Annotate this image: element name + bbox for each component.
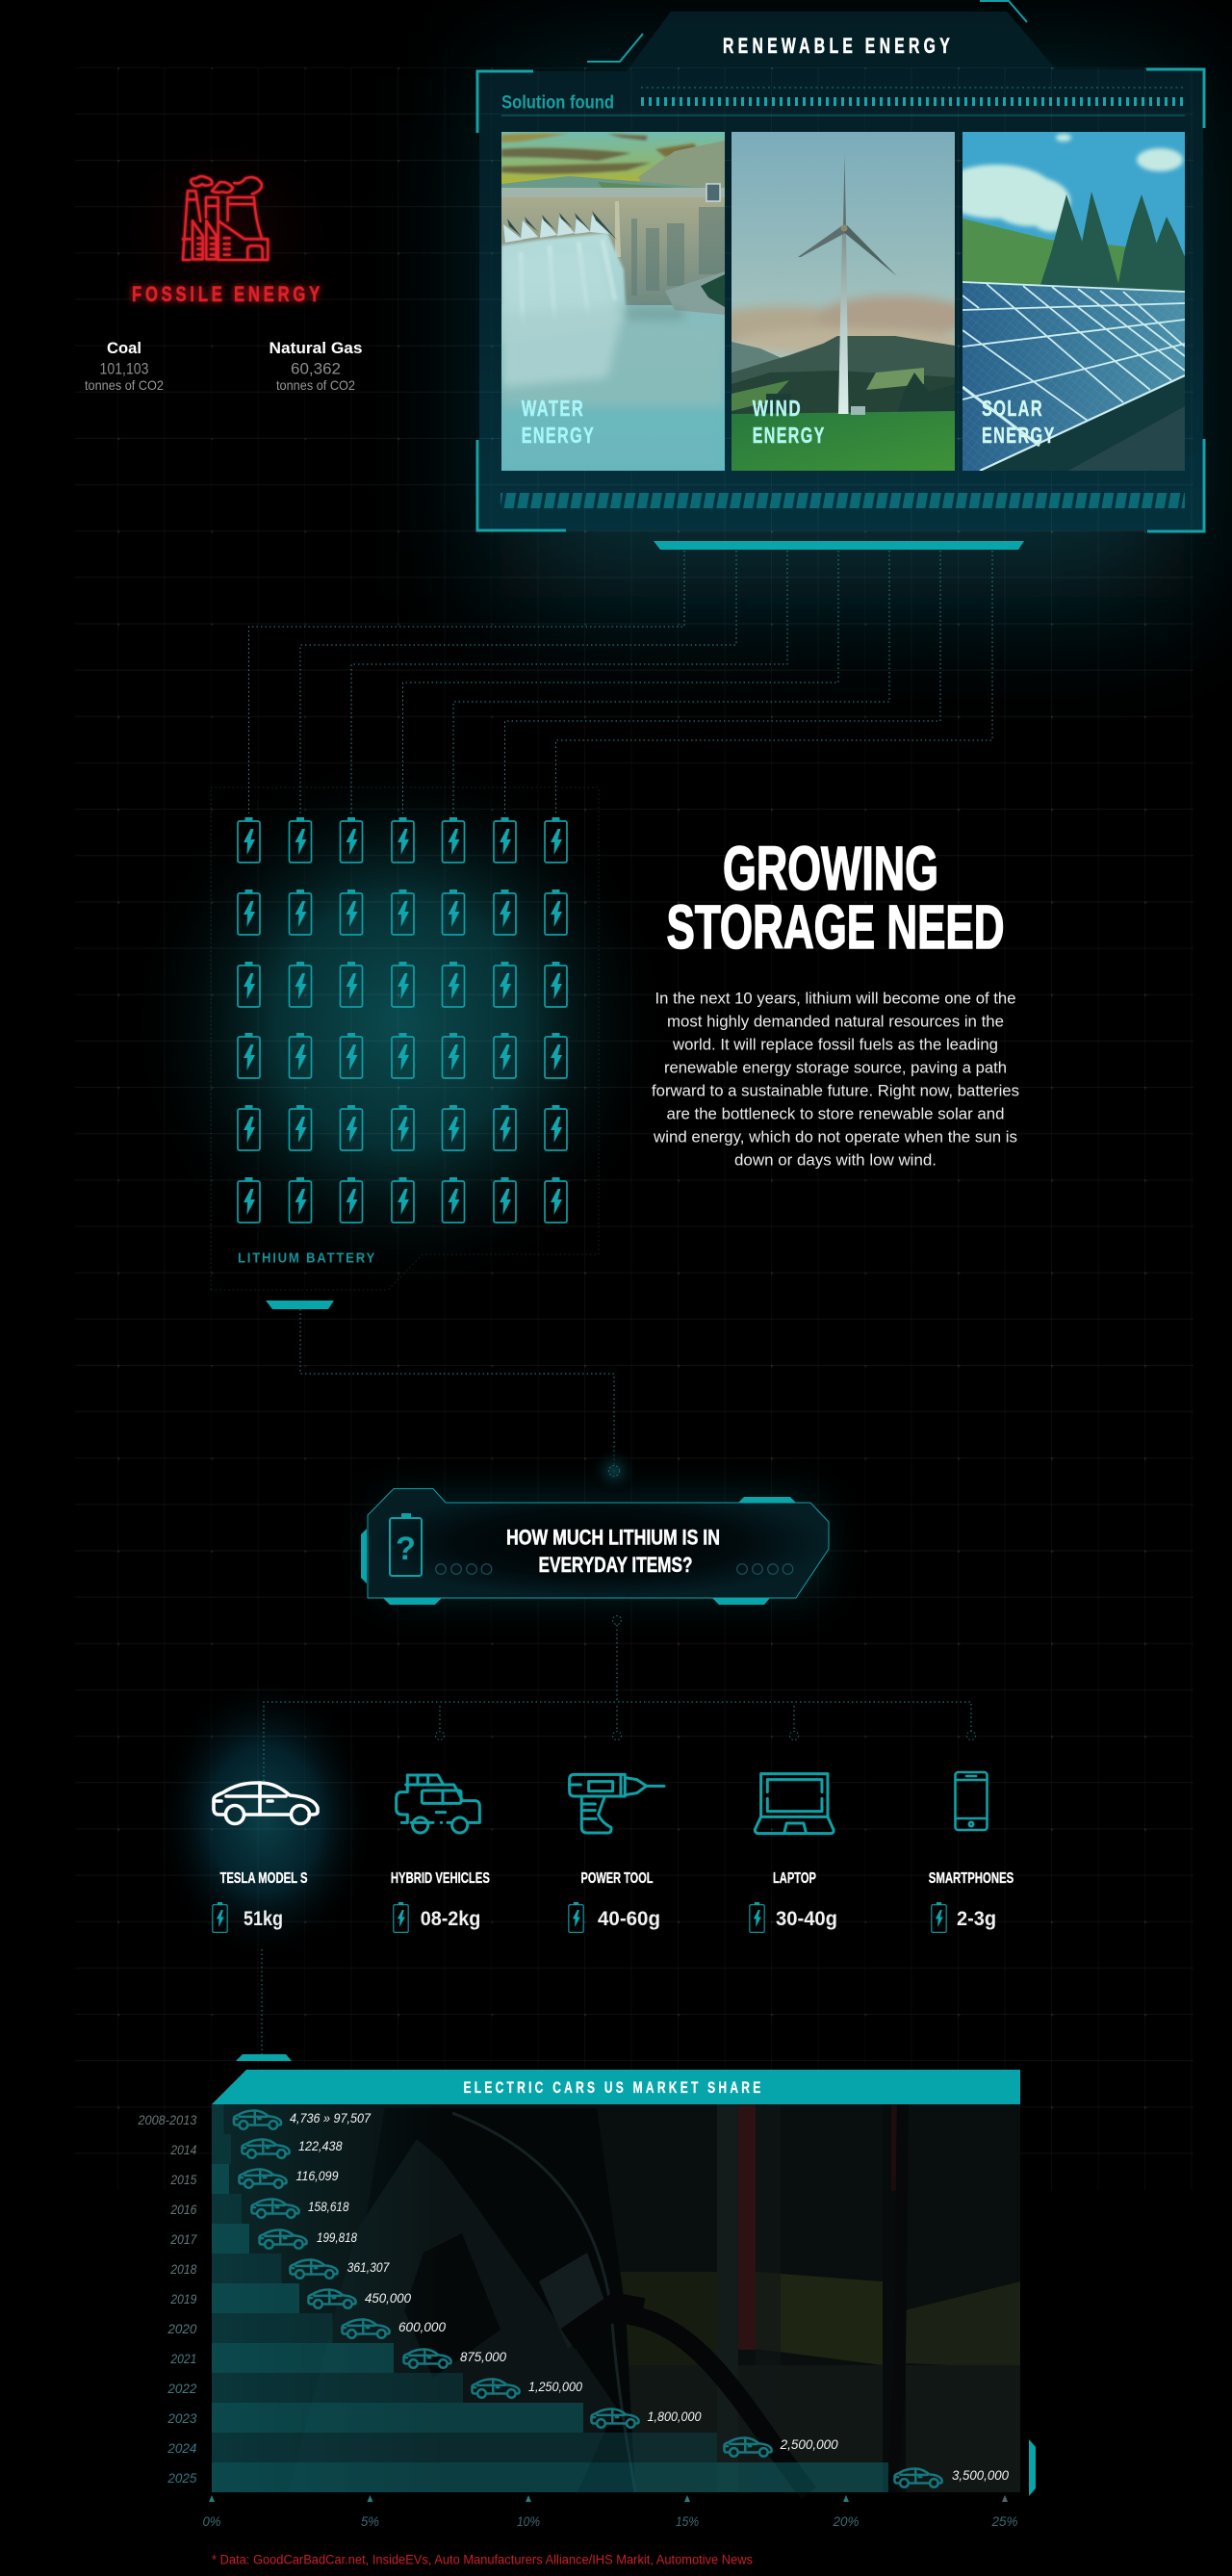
stat: natural gas: Natural Gas <box>270 339 362 357</box>
connector: tesla to chart <box>261 1949 263 2054</box>
image: wind energy <box>732 132 955 471</box>
batteries row 1 <box>238 817 567 863</box>
text block: storage description: are the bottleneck to store renewable solar and <box>666 1105 1005 1122</box>
connectors: panel to batteries <box>248 551 992 813</box>
label: wind energy <box>753 396 826 448</box>
glow: renewable panel <box>500 77 1184 597</box>
stat: coal <box>85 339 164 393</box>
year labels: 2022 <box>167 2381 197 2396</box>
top decorative brackets <box>587 1 1027 62</box>
item: power tool <box>569 1774 664 1932</box>
label: smartphones: SMARTPHONES <box>929 1870 1014 1887</box>
x axis: 10% <box>517 2513 540 2529</box>
glow: tesla car <box>154 1675 375 1964</box>
label: solar energy: SOLAR <box>982 396 1043 421</box>
x axis: 25% <box>991 2513 1018 2529</box>
chart tab <box>236 2054 292 2061</box>
icon: drill <box>570 1774 664 1833</box>
stat: coal: Coal <box>107 339 141 357</box>
value labels: 3,500,000 <box>952 2468 1009 2483</box>
label: wind energy: ENERGY <box>753 423 826 448</box>
wind turbine <box>798 154 897 415</box>
right tab <box>1029 2439 1036 2496</box>
x axis: 0% <box>202 2513 221 2529</box>
stat: coal: tonnes of CO2 <box>85 377 164 393</box>
label: solution found: Solution found <box>501 92 614 114</box>
year labels: 2014 <box>170 2142 197 2157</box>
value: 40-60g: 40-60g <box>598 1908 660 1930</box>
heading: growing storage need: GROWING <box>723 834 938 903</box>
value labels <box>290 2111 1009 2483</box>
batteries row 3 <box>238 962 567 1007</box>
stat: coal: 101,103 <box>100 360 148 377</box>
label: hybrid vehicles: HYBRID VEHICLES <box>391 1870 490 1887</box>
value labels: 875,000 <box>460 2350 506 2364</box>
item: laptop <box>750 1774 837 1932</box>
background grid <box>75 67 1194 2190</box>
text block: storage description: world. It will replace fossil fuels as the leading <box>672 1036 998 1053</box>
value labels: 158,618 <box>308 2200 349 2214</box>
value: 30-40g: 30-40g <box>776 1908 837 1930</box>
value: 2-3g: 2-3g <box>957 1908 996 1930</box>
value labels: 361,307 <box>347 2260 390 2275</box>
label: solar energy: ENERGY <box>982 423 1056 448</box>
icon: car <box>214 1783 318 1823</box>
value labels: 450,000 <box>365 2291 411 2306</box>
icon: small battery <box>213 1902 227 1932</box>
battery base tab <box>266 1301 334 1309</box>
value labels: 2,500,000 <box>780 2437 838 2452</box>
year labels: 2019 <box>170 2291 197 2306</box>
item: smartphones <box>929 1772 1014 1932</box>
year labels: 2020 <box>167 2321 197 2336</box>
label: wind energy: WIND <box>753 396 802 421</box>
glow: battery grid <box>125 748 674 1297</box>
renewable panel background <box>479 12 1203 530</box>
value labels: 1,250,000 <box>528 2380 582 2394</box>
panel frame <box>368 1488 829 1598</box>
icon: phone <box>955 1772 988 1830</box>
car markers <box>234 2110 942 2487</box>
icon: laptop <box>755 1774 834 1834</box>
chart background photo <box>212 2104 1020 2493</box>
icon: jeep <box>397 1775 479 1833</box>
item: hybrid vehicles <box>391 1775 490 1932</box>
year labels <box>137 2112 197 2486</box>
label: water energy: WATER <box>522 396 584 421</box>
value: 08-2kg: 08-2kg <box>421 1908 480 1930</box>
icon: factory <box>183 176 268 260</box>
batteries row 4 <box>238 1033 567 1078</box>
value labels: 116,099 <box>296 2169 339 2183</box>
batteries row 5 <box>238 1105 567 1150</box>
connectors: question panel to items <box>264 1615 976 1781</box>
year labels: 2023 <box>167 2410 197 2426</box>
panel: electric cars market share chart <box>137 2054 1036 2529</box>
frame tabs <box>361 1497 796 1605</box>
glow: lithium question panel <box>385 1502 818 1593</box>
year labels: 2018 <box>170 2261 197 2277</box>
year labels: 2017 <box>170 2231 197 2247</box>
label: lithium battery: LITHIUM BATTERY <box>238 1249 376 1267</box>
heading: renewable energy: RENEWABLE ENERGY <box>723 34 954 58</box>
x axis <box>202 2495 1018 2529</box>
corner brackets <box>477 69 1204 531</box>
label: power tool: POWER TOOL <box>581 1870 653 1887</box>
year labels: 2016 <box>170 2202 197 2217</box>
value labels: 4,736 » 97,507 <box>290 2111 371 2125</box>
image: water energy <box>501 132 725 471</box>
progress stripes <box>500 493 1185 508</box>
stat: natural gas: tonnes of CO2 <box>276 377 355 393</box>
heading: how much lithium <box>506 1525 720 1577</box>
value: 51kg: 51kg <box>244 1908 283 1930</box>
x axis: 20% <box>833 2513 859 2529</box>
heading: fossile energy: FOSSILE ENERGY <box>132 282 323 306</box>
bars <box>212 2104 888 2492</box>
value labels: 1,800,000 <box>647 2409 702 2424</box>
text block: storage description: wind energy, which do not operate when the sun is <box>653 1128 1017 1146</box>
battery frame <box>211 787 599 1290</box>
label: water energy: ENERGY <box>522 423 595 448</box>
icon: battery question <box>390 1513 422 1576</box>
value labels: 600,000 <box>398 2320 446 2334</box>
text block: storage description: most highly demanded natural resources in the <box>667 1013 1004 1030</box>
year labels: 2025 <box>167 2470 197 2486</box>
footer: data sources: * Data: GoodCarBadCar.net, InsideEVs, Auto Manufacturers Alliance/IHS Markit, Automotive News <box>212 2553 753 2566</box>
image: solar energy <box>938 132 1185 471</box>
panel: battery grid <box>211 787 599 1309</box>
status meter <box>501 88 1185 116</box>
panel base bar <box>654 541 1024 550</box>
heading: growing storage need <box>666 834 1005 962</box>
heading: how much lithium: EVERYDAY ITEMS? <box>539 1553 693 1577</box>
stat: natural gas <box>270 339 362 393</box>
text block: storage description: In the next 10 years, lithium will become one of the <box>654 990 1016 1007</box>
year labels: 2008-2013 <box>137 2112 197 2127</box>
item: tesla model s <box>213 1783 318 1932</box>
connector: battery to question panel <box>300 1309 639 1496</box>
x axis: 15% <box>676 2513 699 2529</box>
panel: renewable energy <box>477 1 1204 531</box>
icon: small battery <box>750 1902 764 1932</box>
panel: fossil energy <box>85 176 362 393</box>
text block: storage description: forward to a sustainable future. Right now, batteries <box>652 1082 1019 1099</box>
batteries row 6 <box>238 1177 567 1223</box>
label: water energy <box>522 396 595 448</box>
text block: storage description <box>652 990 1019 1169</box>
value labels: 122,438 <box>298 2139 343 2153</box>
x axis: 5% <box>361 2513 379 2529</box>
icon: small battery <box>394 1902 408 1932</box>
label: laptop: LAPTOP <box>773 1870 816 1887</box>
heading: how much lithium: HOW MUCH LITHIUM IS IN <box>506 1525 720 1550</box>
value labels: 199,818 <box>317 2230 357 2245</box>
decorative dots <box>436 1564 793 1574</box>
text block: storage description: renewable energy storage source, paving a path <box>664 1059 1007 1076</box>
icon: battery question: ? <box>396 1531 416 1567</box>
chart title: ELECTRIC CARS US MARKET SHARE <box>464 2079 764 2097</box>
icon: small battery <box>569 1902 583 1932</box>
batteries row 2 <box>238 889 567 935</box>
label: tesla model s: TESLA MODEL S <box>219 1870 308 1887</box>
icon: small battery <box>932 1902 946 1932</box>
year labels: 2021 <box>170 2351 196 2366</box>
text block: storage description: down or days with low wind. <box>734 1151 937 1169</box>
chart header <box>212 2070 1020 2104</box>
year labels: 2024 <box>167 2440 197 2456</box>
heading: growing storage need: STORAGE NEED <box>666 892 1005 962</box>
label: solar energy <box>982 396 1056 448</box>
stat: natural gas: 60,362 <box>291 360 341 377</box>
panel: how much lithium <box>361 1488 829 1605</box>
glow: fossil energy <box>100 125 350 337</box>
year labels: 2015 <box>170 2172 197 2187</box>
